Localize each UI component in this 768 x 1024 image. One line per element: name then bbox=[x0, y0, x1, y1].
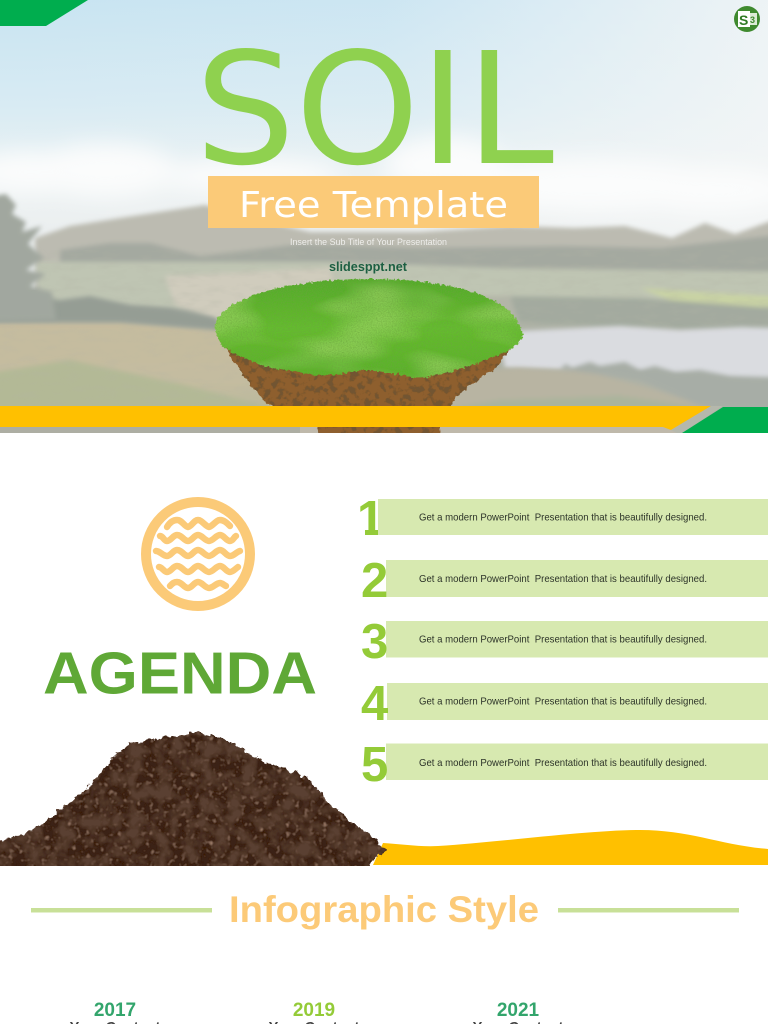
agenda item 3: 3 bbox=[361, 615, 388, 669]
section heading: Infographic Style: Infographic Style bbox=[229, 889, 539, 930]
agenda item 2 bbox=[361, 554, 768, 608]
grey ribbon accent bbox=[671, 406, 723, 433]
soil pile bbox=[0, 732, 387, 870]
top-left green corner tab bbox=[0, 0, 88, 26]
agenda item 5: Get a modern PowerPoint Presentation that is beautifully designed. bbox=[419, 758, 707, 769]
bottom-right green corner tab bbox=[682, 407, 768, 433]
conifer tree bbox=[0, 194, 56, 322]
agenda item 4: 4 bbox=[361, 677, 388, 731]
tree line bbox=[0, 294, 218, 332]
agenda item 4: Get a modern PowerPoint Presentation that is beautifully designed. bbox=[419, 696, 707, 708]
footer cleanup below pile bbox=[0, 866, 420, 874]
agenda item 1 bbox=[355, 492, 768, 546]
timeline column 2017 bbox=[70, 1000, 161, 1024]
agenda item 2: 2 bbox=[361, 554, 388, 608]
title: SOIL: SOIL bbox=[195, 19, 554, 200]
subtitle banner: Free Template: Free Template bbox=[239, 185, 508, 226]
foreground meadow bbox=[0, 322, 272, 406]
subtitle banner: Free Template bbox=[208, 176, 539, 228]
agenda water icon bbox=[146, 502, 250, 606]
timeline column 2021 bbox=[473, 1000, 564, 1024]
section heading: Infographic Style bbox=[31, 889, 739, 930]
timeline column 2021: 2021 bbox=[497, 1000, 540, 1021]
logo badge bbox=[734, 6, 760, 32]
agenda item 4 bbox=[361, 677, 768, 731]
yellow ribbon bbox=[0, 406, 711, 430]
floating grass island bbox=[215, 279, 523, 440]
yellow wave bbox=[373, 830, 768, 865]
timeline column 2019 bbox=[269, 1000, 360, 1024]
hillside and far tree line bbox=[451, 360, 768, 406]
sub title text: Insert the Sub Title of Your Presentation bbox=[290, 237, 447, 247]
agenda item 1: 1 bbox=[357, 492, 384, 546]
lake bbox=[498, 326, 768, 386]
agenda item 5 bbox=[361, 738, 768, 792]
logo badge: 3 bbox=[750, 15, 755, 25]
agenda item 5: 5 bbox=[361, 738, 388, 792]
agenda heading: AGENDA bbox=[43, 640, 317, 706]
timeline column 2017: 2017 bbox=[94, 1000, 136, 1021]
agenda item 3: Get a modern PowerPoint Presentation that is beautifully designed. bbox=[419, 634, 707, 646]
logo badge: S bbox=[739, 12, 748, 28]
cover background photo: sky, mountains and lake bbox=[0, 0, 768, 440]
far mountains bbox=[35, 205, 768, 300]
agenda item 3 bbox=[361, 615, 768, 669]
timeline column 2019: 2019 bbox=[293, 1000, 335, 1021]
website label: slidesppt.net bbox=[329, 260, 408, 274]
agenda item 2: Get a modern PowerPoint Presentation that is beautifully designed. bbox=[419, 574, 707, 585]
agenda item 1: Get a modern PowerPoint Presentation that is beautifully designed. bbox=[419, 512, 707, 524]
